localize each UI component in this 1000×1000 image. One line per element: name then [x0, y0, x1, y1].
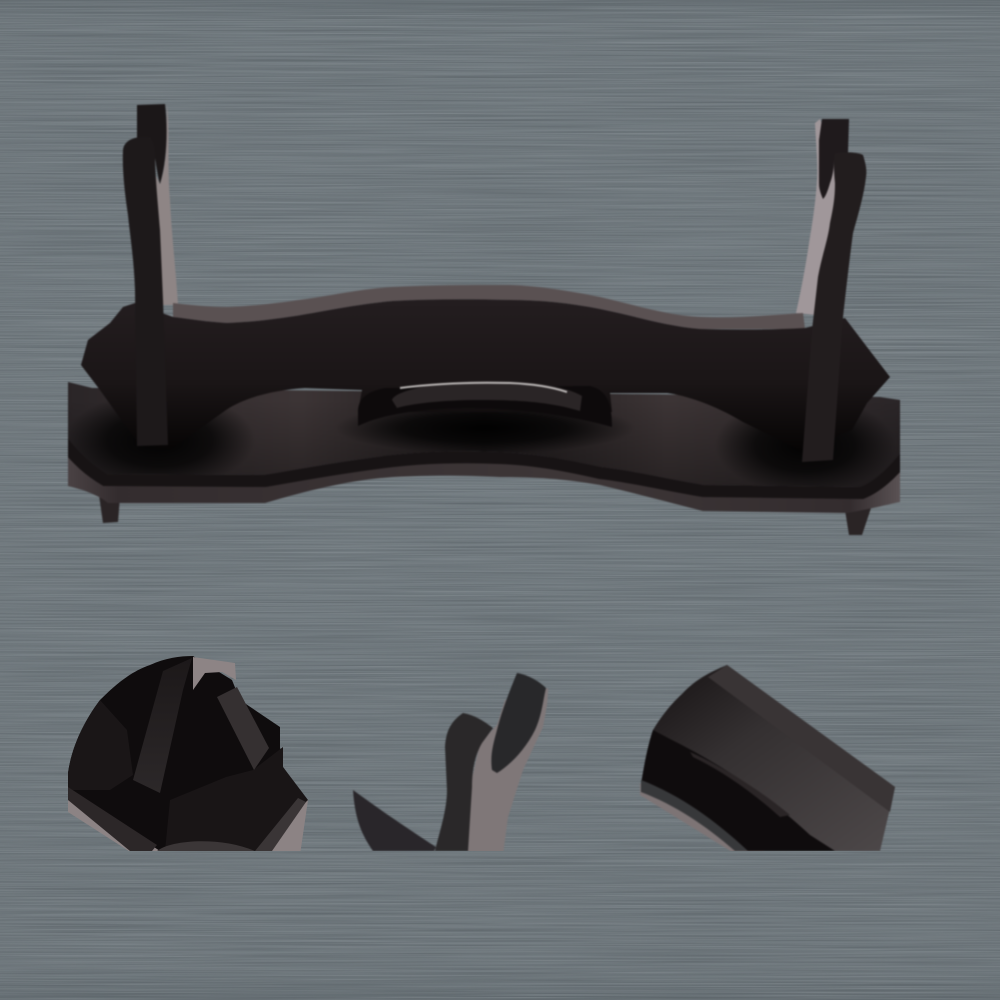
feet: [98, 488, 872, 535]
corner: centre edge: [157, 841, 255, 851]
hook: curved wedge: [353, 790, 436, 851]
corner: lower right body: [165, 747, 308, 851]
left rear post: [137, 104, 178, 305]
base: top surface: [68, 382, 900, 487]
corner: main body: [68, 656, 305, 851]
right front post: [802, 152, 866, 462]
right rear post: [796, 119, 849, 316]
plank: light under edge: [640, 786, 762, 851]
hook: front finger: [435, 713, 493, 851]
back plank with wings: [81, 285, 890, 450]
center arch shadow: [358, 386, 612, 427]
corner: base edge: [68, 787, 157, 851]
corner: light edges: [68, 800, 308, 851]
detail view: curved plank: [640, 665, 895, 855]
plank: main shape: [641, 665, 895, 851]
detail view: hook: [353, 673, 548, 855]
plank: bevel: [641, 780, 748, 851]
hook: back finger: [491, 673, 546, 773]
base: side edge: [68, 442, 900, 513]
corner: upright post: [133, 658, 192, 793]
corner: wing bevel: [217, 687, 269, 770]
hook: light inner face: [467, 688, 548, 855]
plank: slot: [690, 752, 790, 817]
base: shadows: [70, 406, 898, 487]
base: bevel band: [62, 441, 906, 493]
detail view: corner of stand: [68, 656, 308, 855]
corner: right bevel: [255, 798, 306, 851]
corner: left wedge: [68, 700, 133, 790]
plank: dark lower part: [641, 730, 835, 851]
plank: top strip: [708, 665, 895, 812]
main view: double sword stand: [62, 104, 906, 535]
corner: lit top: [193, 657, 236, 690]
center slot with highlight: [392, 381, 582, 411]
left front post: [123, 137, 168, 446]
